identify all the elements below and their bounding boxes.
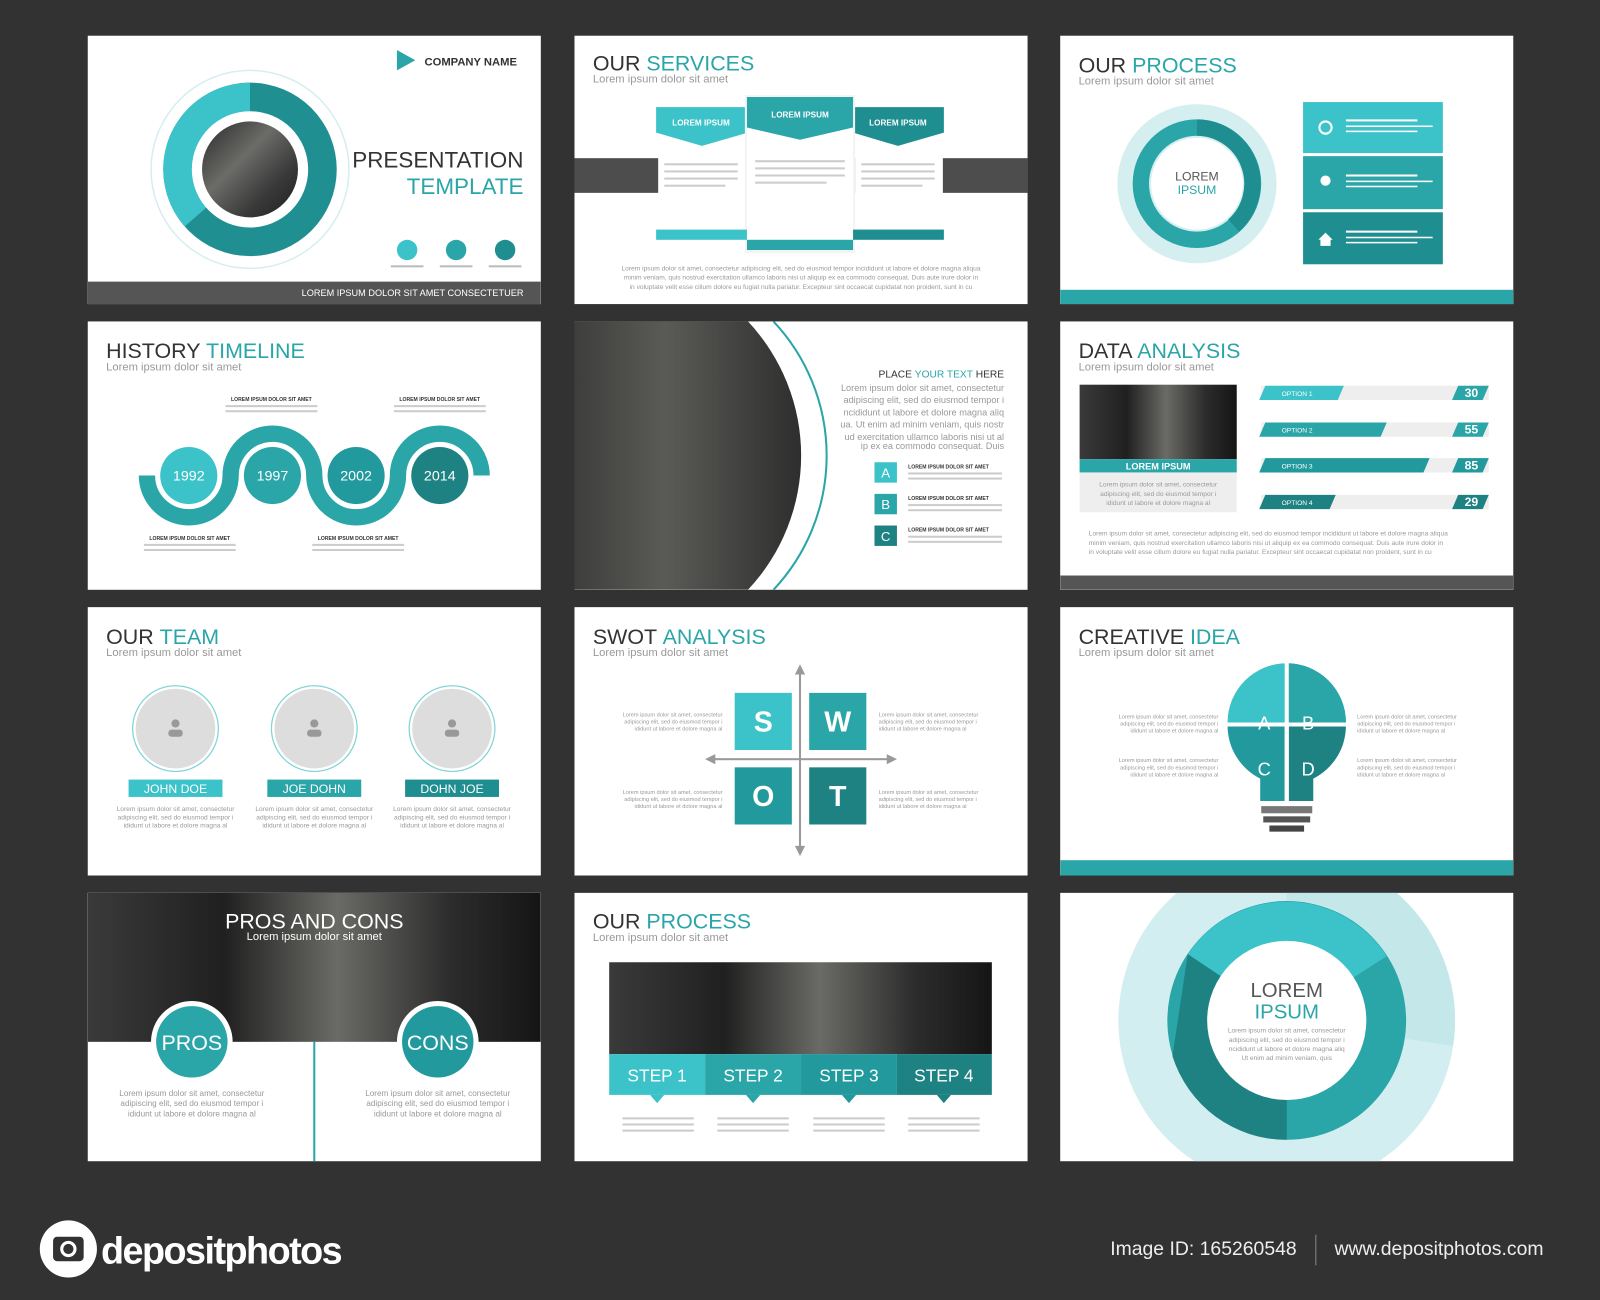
heading: Lorem ipsum dolor sit amet xyxy=(593,932,729,944)
big circle: ncididunt ut labore et dolore magna aliq xyxy=(1229,1046,1345,1053)
heading: OUR PROCESS xyxy=(593,910,751,934)
service columns: LOREM IPSUM xyxy=(672,119,730,128)
list A B C: LOREM IPSUM DOLOR SIT AMET xyxy=(908,464,990,470)
title: TEMPLATE xyxy=(407,174,523,199)
donut xyxy=(1117,104,1277,263)
footer bar: LOREM IPSUM DOLOR SIT AMET CONSECTETUER xyxy=(302,288,524,298)
cons: CONS xyxy=(407,1031,469,1055)
team members: ididunt ut labore et dolore magna al xyxy=(124,823,228,830)
big circle: Ut enim ad minim veniam, quis xyxy=(1241,1055,1333,1062)
heading: Lorem ipsum dolor sit amet xyxy=(1079,76,1215,88)
side texts: ididunt ut labore et dolore magna al xyxy=(1357,773,1445,779)
bulb: B xyxy=(1302,713,1314,734)
panel: pros and cons xyxy=(88,893,541,1161)
panel: swot analysis xyxy=(574,607,1028,876)
labels: LOREM IPSUM DOLOR SIT AMET xyxy=(318,536,399,542)
photo header: PROS AND CONS xyxy=(225,910,403,934)
text block: ua. Ut enim ad minim veniam, quis nostr xyxy=(840,420,1004,430)
swot squares: O xyxy=(752,781,774,813)
steps: STEP 4 xyxy=(914,1066,974,1086)
footer: image id: Image ID: 165260548 www.depositphotos.com xyxy=(1110,1239,1544,1260)
photo card: adipiscing elit, sed do eiusmod tempor i xyxy=(1100,491,1217,498)
bar chart: 55 xyxy=(1465,423,1478,437)
wave timeline: 2014 xyxy=(424,469,456,485)
photo card: Lorem ipsum dolor sit amet, consectetur xyxy=(1099,482,1218,489)
big circle: IPSUM xyxy=(1254,1001,1319,1023)
labels: LOREM IPSUM DOLOR SIT AMET xyxy=(231,397,313,403)
side texts: ididunt ut labore et dolore magna al xyxy=(879,727,967,733)
paragraph: in voluptate velit esse cillum dolore eu fugiat nulla pariatur. Excepteur sint occaecat cupidatat non proident, sunt in cu xyxy=(1089,549,1432,556)
step boxes xyxy=(1303,102,1443,264)
labels: LOREM IPSUM DOLOR SIT AMET xyxy=(149,536,231,542)
side texts: Lorem ipsum dolor sit amet, consectetur xyxy=(879,712,978,718)
paragraph xyxy=(621,265,981,291)
team members: ididunt ut labore et dolore magna al xyxy=(262,823,367,830)
title: PRESENTATION xyxy=(352,147,523,172)
side texts: Lorem ipsum dolor sit amet, consectetur xyxy=(1357,714,1457,720)
bulb xyxy=(1228,658,1346,832)
photo xyxy=(574,321,827,590)
side texts: adipiscing elit, sed do eiusmod tempor i xyxy=(624,797,722,803)
cons: Lorem ipsum dolor sit amet, consectetur xyxy=(365,1089,511,1098)
big circle: Lorem ipsum dolor sit amet, consectetur xyxy=(1228,1028,1346,1035)
team members: adipiscing elit, sed do eiusmod tempor i xyxy=(118,814,234,821)
list A B C: LOREM IPSUM DOLOR SIT AMET xyxy=(908,496,990,502)
list A B C: LOREM IPSUM DOLOR SIT AMET xyxy=(908,528,990,534)
bar chart: OPTION 2 xyxy=(1282,428,1313,435)
photo header: Lorem ipsum dolor sit amet xyxy=(247,931,383,943)
heading: Lorem ipsum dolor sit amet xyxy=(106,647,242,659)
ring graphic xyxy=(151,70,349,268)
team members: adipiscing elit, sed do eiusmod tempor i xyxy=(394,814,511,821)
team members: DOHN JOE xyxy=(420,782,484,796)
panel: our process xyxy=(1060,36,1513,304)
photo card: ididunt ut labore et dolore magna al xyxy=(1106,500,1211,507)
team members: Lorem ipsum dolor sit amet, consectetur xyxy=(393,806,512,813)
bar chart: 30 xyxy=(1465,386,1478,400)
footer: depositphotos logo: depositphotos xyxy=(101,1229,342,1271)
bar chart xyxy=(1259,386,1489,509)
side texts: ididunt ut labore et dolore magna al xyxy=(634,727,722,733)
donut: IPSUM xyxy=(1178,183,1216,197)
panel: presentation template xyxy=(88,36,541,304)
heading: Lorem ipsum dolor sit amet xyxy=(1079,647,1215,659)
side texts: Lorem ipsum dolor sit amet, consectetur xyxy=(1119,714,1218,720)
text block: PLACE YOUR TEXT HERE xyxy=(879,370,1004,381)
side texts: adipiscing elit, sed do eiusmod tempor i xyxy=(1120,765,1218,771)
paragraph: Lorem ipsum dolor sit amet, consectetur adipiscing elit, sed do eiusmod tempor incididunt ut labore et dolore magna aliqua xyxy=(621,265,981,272)
footer: depositphotos logo xyxy=(40,1220,342,1278)
pros: adipiscing elit, sed do eiusmod tempor i xyxy=(120,1099,263,1108)
bulb: A xyxy=(1258,713,1271,734)
heading: CREATIVE IDEA xyxy=(1079,625,1241,649)
steps: STEP 2 xyxy=(723,1066,783,1086)
bar chart: OPTION 1 xyxy=(1282,391,1313,398)
swot squares: W xyxy=(824,707,851,739)
side texts: adipiscing elit, sed do eiusmod tempor i xyxy=(879,797,977,803)
photo xyxy=(609,962,992,1054)
side texts xyxy=(623,712,978,810)
photo card xyxy=(1080,385,1237,512)
pros: Lorem ipsum dolor sit amet, consectetur xyxy=(119,1089,265,1098)
side texts: ididunt ut labore et dolore magna al xyxy=(1130,773,1218,779)
wave timeline: 1992 xyxy=(173,469,205,485)
text block: Lorem ipsum dolor sit amet, consectetur xyxy=(841,383,1004,393)
bar chart: OPTION 3 xyxy=(1282,463,1313,470)
heading xyxy=(106,625,242,659)
wave timeline: 1997 xyxy=(257,469,288,485)
side texts: Lorem ipsum dolor sit amet, consectetur xyxy=(879,790,978,796)
wave timeline xyxy=(147,434,482,517)
paragraph: minim veniam, quis nostrud exercitation ullamco laboris nisi ut aliquip ex ea commodo consequat. Duis aute irure dolor in xyxy=(624,275,978,282)
heading: HISTORY TIMELINE xyxy=(106,339,305,363)
heading: OUR TEAM xyxy=(106,625,219,649)
team members: Lorem ipsum dolor sit amet, consectetur xyxy=(117,806,235,813)
bulb: C xyxy=(1258,759,1271,780)
side texts: adipiscing elit, sed do eiusmod tempor i xyxy=(1357,722,1455,728)
panel: photo with text xyxy=(574,321,1028,590)
swot squares xyxy=(735,693,866,824)
team members: JOHN DOE xyxy=(144,782,207,796)
heading: DATA ANALYSIS xyxy=(1079,339,1240,363)
service columns xyxy=(656,95,944,253)
paragraph: Lorem ipsum dolor sit amet, consectetur adipiscing elit, sed do eiusmod tempor incididunt ut labore et dolore magna aliqua xyxy=(1089,531,1448,538)
steps: STEP 3 xyxy=(819,1066,879,1086)
heading: Lorem ipsum dolor sit amet xyxy=(106,361,242,373)
company name: COMPANY NAME xyxy=(424,56,517,68)
cons xyxy=(365,1001,511,1118)
list A B C: C xyxy=(881,529,891,544)
photo header xyxy=(88,893,541,1042)
big circle: LOREM xyxy=(1250,980,1323,1002)
paragraph: minim veniam, quis nostrud exercitation ullamco laboris nisi ut aliquip ex ea commodo consequat. Duis aute irure dolor in xyxy=(1089,540,1443,547)
team members xyxy=(117,686,512,830)
labels: LOREM IPSUM DOLOR SIT AMET xyxy=(399,397,481,403)
bulb: D xyxy=(1302,759,1315,780)
labels xyxy=(144,397,486,551)
heading: OUR PROCESS xyxy=(1079,53,1237,77)
panel: creative idea xyxy=(1060,607,1513,876)
company name xyxy=(397,50,517,70)
side texts: adipiscing elit, sed do eiusmod tempor i xyxy=(1357,765,1455,771)
pros: ididunt ut labore et dolore magna al xyxy=(128,1109,256,1118)
side texts: adipiscing elit, sed do eiusmod tempor i xyxy=(624,719,722,725)
bar chart: 85 xyxy=(1465,458,1478,472)
panel: history timeline xyxy=(88,321,541,590)
bar chart: 29 xyxy=(1465,495,1478,509)
list A B C xyxy=(874,462,1002,546)
list A B C: B xyxy=(881,497,890,512)
service columns: LOREM IPSUM xyxy=(869,119,927,128)
steps xyxy=(609,1054,992,1132)
heading xyxy=(1079,625,1241,659)
photo card: LOREM IPSUM xyxy=(1126,461,1191,471)
side texts: ididunt ut labore et dolore magna al xyxy=(634,804,722,810)
paragraph: in voluptate velit esse cillum dolore eu fugiat nulla pariatur. Excepteur sint occaecat cupidatat non proident, sunt in cu xyxy=(630,284,973,291)
side texts: adipiscing elit, sed do eiusmod tempor i xyxy=(879,719,977,725)
list A B C: A xyxy=(881,466,890,481)
heading: Lorem ipsum dolor sit amet xyxy=(593,74,729,86)
team members: ididunt ut labore et dolore magna al xyxy=(400,823,504,830)
side texts: ididunt ut labore et dolore magna al xyxy=(879,804,967,810)
icons xyxy=(391,240,521,267)
bar chart: OPTION 4 xyxy=(1282,500,1313,507)
side texts: adipiscing elit, sed do eiusmod tempor i xyxy=(1120,722,1218,728)
panel: our process steps xyxy=(574,893,1028,1161)
service columns: LOREM IPSUM xyxy=(771,110,829,119)
side texts: Lorem ipsum dolor sit amet, consectetur xyxy=(1119,758,1218,764)
panel: lorem ipsum circle xyxy=(1060,893,1513,1161)
text block: ncididunt ut labore et dolore magna aliq xyxy=(843,407,1004,417)
big circle xyxy=(1118,852,1455,1189)
donut: LOREM xyxy=(1175,170,1219,184)
side texts: ididunt ut labore et dolore magna al xyxy=(1130,729,1218,735)
steps: STEP 1 xyxy=(627,1066,687,1086)
pros: PROS xyxy=(162,1031,222,1055)
heading: Lorem ipsum dolor sit amet xyxy=(593,647,729,659)
team members: JOE DOHN xyxy=(283,782,346,796)
text block: ud exercitation ullamco laboris nisi ut al xyxy=(845,432,1004,442)
team members: adipiscing elit, sed do eiusmod tempor i xyxy=(256,814,373,821)
text block: ip ex ea commodo consequat. Duis xyxy=(861,441,1004,451)
side texts: Lorem ipsum dolor sit amet, consectetur xyxy=(1357,758,1457,764)
team members: Lorem ipsum dolor sit amet, consectetur xyxy=(255,806,374,813)
text block: adipiscing elit, sed do eiusmod tempor i xyxy=(843,395,1004,405)
panel: our services xyxy=(574,36,1028,304)
footer bar xyxy=(88,282,541,304)
heading: SWOT ANALYSIS xyxy=(593,625,766,649)
wave timeline: 2002 xyxy=(340,469,372,485)
title xyxy=(352,147,523,199)
side texts: ididunt ut labore et dolore magna al xyxy=(1357,729,1445,735)
panel: data analysis xyxy=(1060,321,1513,590)
big circle: adipiscing elit, sed do eiusmod tempor i xyxy=(1229,1037,1345,1044)
cons: adipiscing elit, sed do eiusmod tempor i xyxy=(366,1099,509,1108)
heading: OUR SERVICES xyxy=(593,51,754,75)
swot squares: S xyxy=(754,707,773,739)
heading: Lorem ipsum dolor sit amet xyxy=(1079,361,1215,373)
arrows xyxy=(705,664,897,856)
side texts xyxy=(1119,714,1457,779)
text block xyxy=(840,370,1004,451)
swot squares: T xyxy=(829,781,847,813)
pros xyxy=(119,1001,265,1118)
side texts: Lorem ipsum dolor sit amet, consectetur xyxy=(623,712,723,718)
side texts: Lorem ipsum dolor sit amet, consectetur xyxy=(623,790,723,796)
cons: ididunt ut labore et dolore magna al xyxy=(374,1109,502,1118)
panel: our team xyxy=(88,607,541,876)
paragraph xyxy=(1089,531,1448,556)
